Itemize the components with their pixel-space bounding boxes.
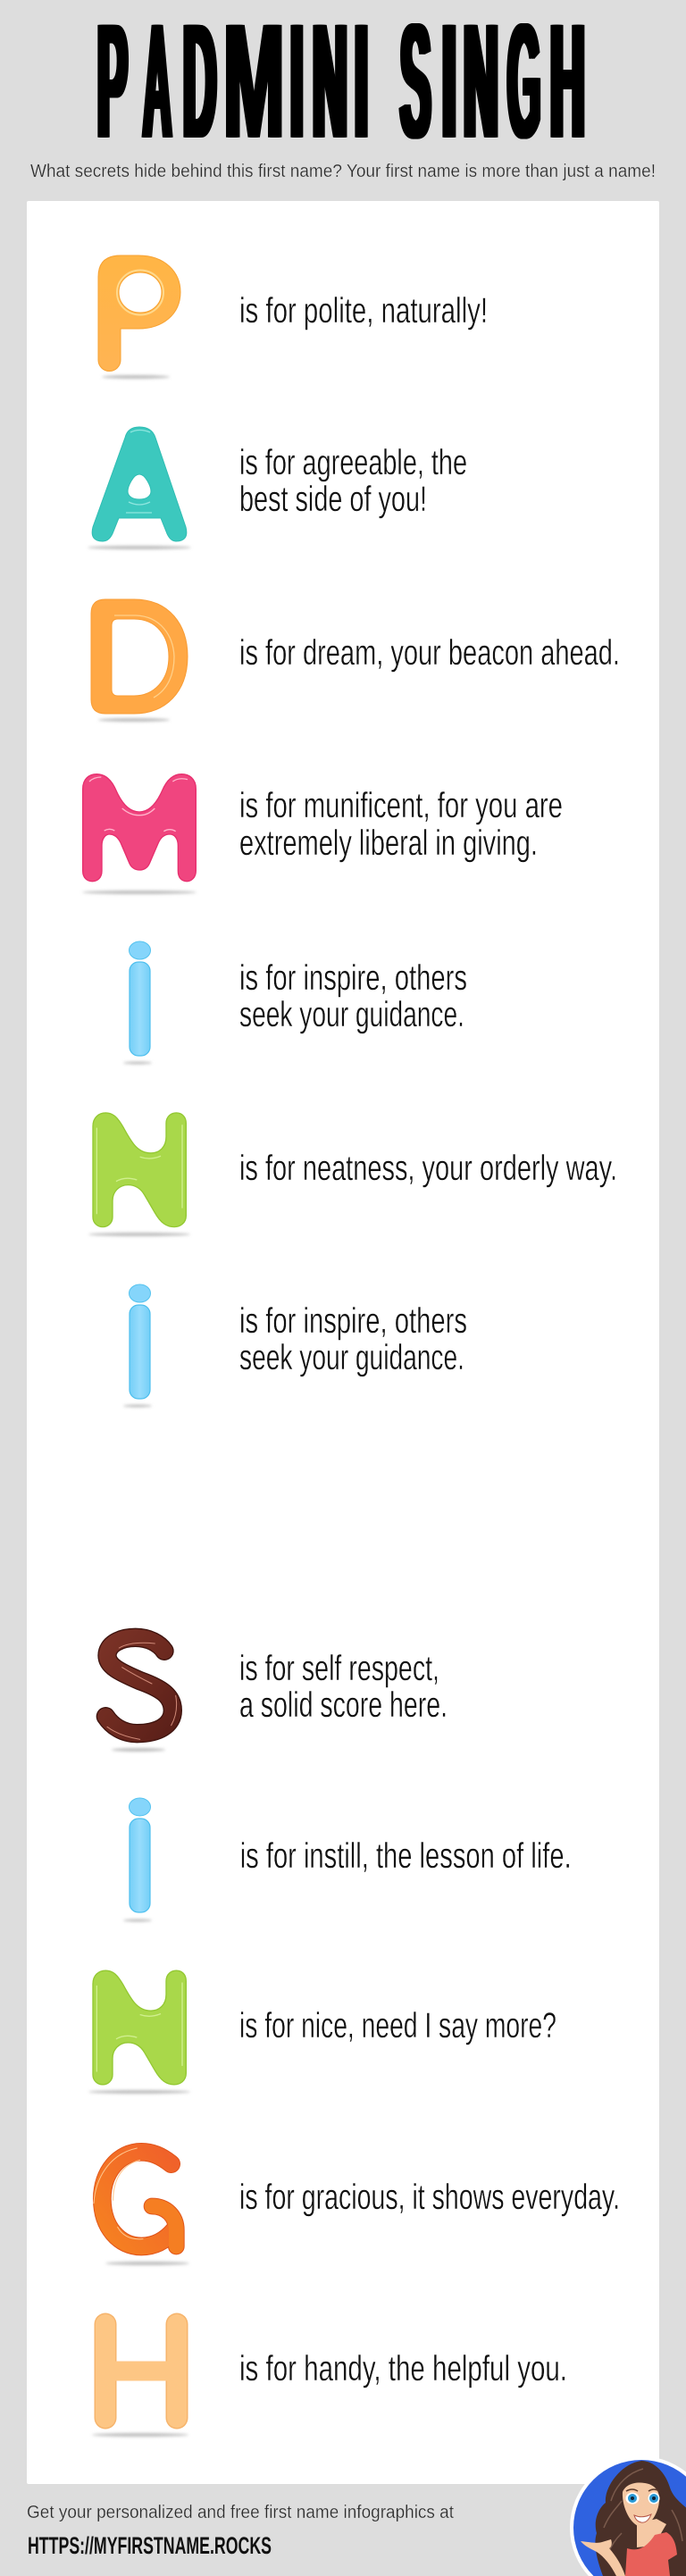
row: letter A <box>88 427 467 549</box>
icon: letter H <box>92 2324 188 2437</box>
row: letter i second <box>123 1284 467 1408</box>
text: S meaning: a solid score here. <box>239 1685 448 1725</box>
subtitle: What secrets hide behind this first name? Your first name is more than just a name! <box>30 162 656 181</box>
text: M meaning: is for munificent, for you are <box>239 786 563 825</box>
text: i meaning <box>239 1301 467 1377</box>
icon: letter i <box>123 1798 152 1922</box>
row: letter N <box>88 1113 617 1236</box>
icon: letter N <box>88 1970 190 2094</box>
text: S meaning: is for self respect, <box>239 1649 439 1688</box>
text: A meaning: is for agreeable, the <box>239 443 467 482</box>
text: A meaning <box>239 443 467 519</box>
text: H meaning: is for handy, the helpful you. <box>239 2349 567 2388</box>
text: i meaning: is for inspire, others <box>239 1301 467 1341</box>
icon: letter G <box>94 2148 189 2265</box>
row: letter i third <box>123 1798 572 1922</box>
icon: letter N <box>88 1113 190 1236</box>
text: i meaning: is for inspire, others <box>239 958 467 998</box>
text: i meaning: is for instill, the lesson of life. <box>240 1836 572 1876</box>
text: M meaning <box>239 786 563 863</box>
row: letter H <box>92 2324 567 2437</box>
title <box>97 0 584 173</box>
icon: letter A <box>88 427 191 549</box>
text: A meaning: best side of you! <box>239 480 427 519</box>
icon: letter M <box>82 774 197 894</box>
row: letter N second <box>88 1970 556 2094</box>
icon: letter S <box>105 1637 177 1752</box>
text: i meaning: seek your guidance. <box>239 995 464 1034</box>
icon: letter P <box>98 255 180 379</box>
footer url: HTTPS://MYFIRSTNAME.ROCKS <box>28 2532 272 2559</box>
row: letter G <box>94 2148 620 2265</box>
row: letter P <box>98 255 488 379</box>
text: P meaning: is for polite, naturally! <box>239 291 488 330</box>
icon: letter i <box>123 941 152 1065</box>
text: i meaning <box>239 958 467 1034</box>
row: letter D <box>91 599 620 722</box>
text: S meaning <box>239 1649 448 1725</box>
row: letter i <box>123 941 467 1065</box>
icon: letter i <box>123 1284 152 1408</box>
row: letter M <box>82 774 563 894</box>
icon: letter D <box>91 599 188 722</box>
text: M meaning: extremely liberal in giving. <box>239 824 538 863</box>
row: letter S <box>105 1637 448 1752</box>
text: i meaning: seek your guidance. <box>239 1338 464 1377</box>
avatar <box>570 2456 686 2576</box>
text: N meaning: is for nice, need I say more? <box>239 2006 556 2045</box>
footer prompt: Get your personalized and free first name infographics at <box>27 2503 454 2522</box>
